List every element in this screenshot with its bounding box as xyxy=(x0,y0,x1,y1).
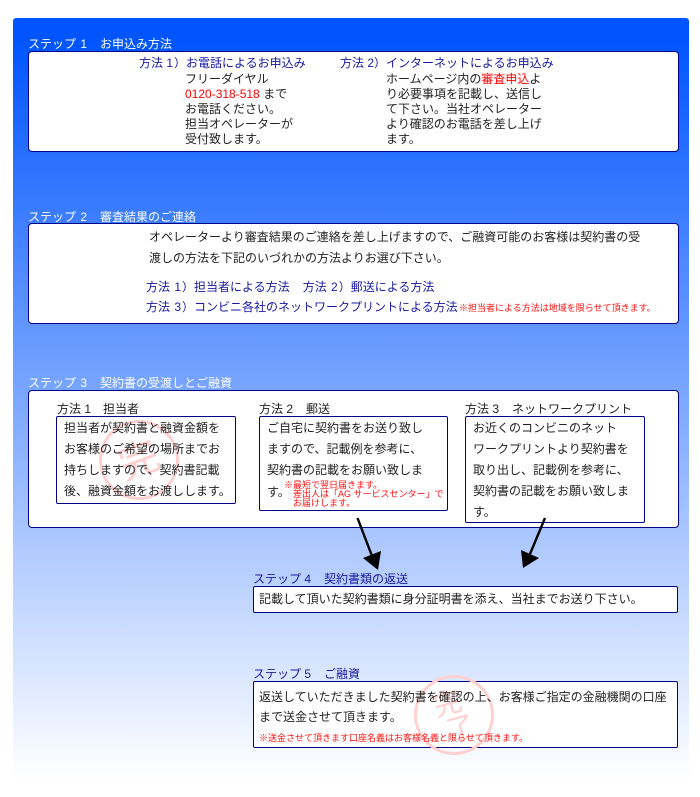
step 1 heading: ステップ 1 お申込み方法 xyxy=(28,37,172,51)
method 3 label: 方法 3 ネットワークプリント xyxy=(465,402,632,416)
step 2 description xyxy=(149,230,640,265)
method 3 text: お近くのコンビニのネット xyxy=(473,421,617,435)
method 3 text: ワークプリントより契約書を xyxy=(473,442,629,456)
step 2 description: 渡しの方法を下記のいづれかの方法よりお選び下さい。 xyxy=(149,251,449,265)
method 1 body: 0120-318-518 まで xyxy=(185,87,287,101)
step 2 methods xyxy=(146,280,656,314)
stamp: completed 2: 了 xyxy=(443,710,478,747)
step 5 text: 返送していただきました契約書を確認の上、お客様ご指定の金融機関の口座 xyxy=(259,690,667,704)
step 2 methods: 方法 1）担当者による方法 方法 2）郵送による方法 xyxy=(146,280,434,294)
method 2 heading: 方法 2）インターネットによるお申込み xyxy=(340,56,554,70)
method 1 box xyxy=(56,416,236,504)
method 1 body: 受付致します。 xyxy=(185,132,268,146)
panel: step 2 xyxy=(28,223,679,324)
method 2 body xyxy=(386,72,542,146)
method 3 text xyxy=(473,421,629,519)
method 2 note: ※最短で翌日届きます。 xyxy=(284,480,382,490)
step 2 heading: ステップ 2 審査結果のご連絡 xyxy=(28,210,196,224)
method 1 heading: 方法 1）お電話によるお申込み xyxy=(139,56,306,70)
method 1 label: 方法 1 担当者 xyxy=(57,402,139,416)
method 1 text: 後、融資金額をお渡しします。 xyxy=(64,484,231,498)
method 1 body: フリーダイヤル xyxy=(185,72,269,86)
step 5 text xyxy=(259,690,667,724)
stamp: completed 1: 完 xyxy=(113,433,166,488)
method 3 box xyxy=(465,416,645,523)
panel: step 5 xyxy=(253,681,678,748)
step 2 methods: 方法 3）コンビニ各社のネットワークプリントによる方法 ※担当者による方法は地域を限らせて頂きます。 xyxy=(146,300,656,314)
method 1 body: お電話ください。 xyxy=(185,102,281,116)
stamp: completed 2: 完 xyxy=(430,685,465,722)
method 2 note: 差出人は「AG サービスセンター」で xyxy=(293,489,444,499)
method 2 box xyxy=(259,416,448,511)
method 2 label: 方法 2 郵送 xyxy=(259,402,330,416)
step 5 note: ※送金させて頂きます口座名義はお客様名義と限らせて頂きます。 xyxy=(259,733,528,743)
method 1 text: 担当者が契約書と融資金額を xyxy=(64,421,220,435)
step 4 heading: ステップ 4 契約書類の返送 xyxy=(253,572,408,586)
stamp: completed 1 xyxy=(99,420,179,500)
method 2 text: ますので、記載例を参考に、 xyxy=(267,442,422,456)
method 2 text: す。 xyxy=(267,485,290,499)
arrow: method 3 to step 4 xyxy=(521,518,546,568)
step 5 heading: ステップ 5 ご融資 xyxy=(253,667,360,681)
method 2 text: ご自宅に契約書をお送り致し xyxy=(267,421,423,435)
method 2 body: ホームページ内の審査申込よ xyxy=(386,72,541,86)
panel: step 3 xyxy=(28,390,679,528)
method 2 text: 契約書の記載をお願い致しま xyxy=(267,463,423,477)
step 4 text: 記載して頂いた契約書類に身分証明書を添え、当社までお送り下さい。 xyxy=(259,592,643,606)
method 2 body: ます。 xyxy=(386,132,421,146)
method 1 body xyxy=(185,72,293,146)
step 5 text: まで送金させて頂きます。 xyxy=(259,710,402,724)
step 2 description: オペレーターより審査結果のご連絡を差し上げますので、ご融資可能のお客様は契約書の受 xyxy=(149,230,640,244)
method 3 text: 取り出し、記載例を参考に、 xyxy=(473,463,629,477)
panel: step 4 xyxy=(253,586,678,613)
panel: step 1 xyxy=(28,51,679,152)
stamp: completed 2 xyxy=(414,675,494,755)
method 1 body: 担当オペレーターが xyxy=(185,117,293,131)
method 3 text: す。 xyxy=(473,505,496,519)
method 2 text xyxy=(267,421,423,499)
method 2 body: て下さい。当社オペレーター xyxy=(386,102,542,116)
arrow: method 2 to step 4 xyxy=(356,518,381,570)
method 1 text: お客様のご希望の場所までお xyxy=(64,442,220,456)
method 2 body: より確認のお電話を差し上げ xyxy=(386,117,542,131)
method 3 text: 契約書の記載をお願い致しま xyxy=(473,484,629,498)
step 3 heading: ステップ 3 契約書の受渡しとご融資 xyxy=(28,376,232,390)
method 2 note: お届けします。 xyxy=(293,498,355,508)
method 2 note xyxy=(284,480,444,508)
method 1 text xyxy=(64,421,231,498)
method 1 text: 持ちしますので、契約書記載 xyxy=(64,463,220,477)
method 2 body: り必要事項を記載し、送信し xyxy=(386,87,542,101)
